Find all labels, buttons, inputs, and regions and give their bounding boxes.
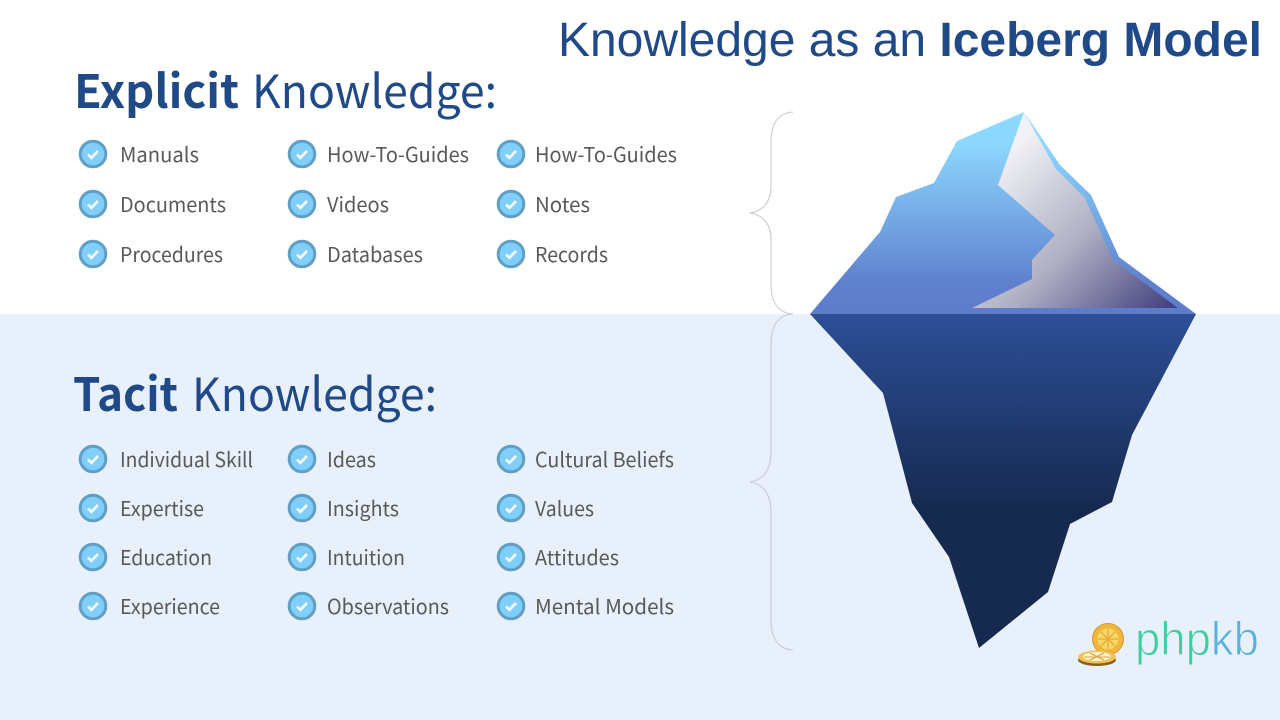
brace: tacit <box>750 314 793 650</box>
iceberg submerged part <box>810 314 1196 648</box>
heading: tacit knowledge: Tacit <box>73 359 178 425</box>
logo wordmark: phpkb <box>1135 612 1259 665</box>
tacit list column 3: Mental Models <box>535 590 674 620</box>
explicit list column 3: Records <box>535 238 608 268</box>
tacit list column 1: Expertise <box>120 492 204 522</box>
logo: phpkb <box>1078 612 1259 666</box>
title: Knowledge as an Iceberg Model <box>558 14 1262 67</box>
tacit list column 2 <box>289 443 449 620</box>
explicit list column 3: How-To-Guides <box>535 138 677 168</box>
iceberg <box>810 112 1196 648</box>
explicit list column 1: Documents <box>120 188 226 218</box>
explicit list column 2: Databases <box>327 238 423 268</box>
tacit list column 1: Individual Skill <box>120 443 253 473</box>
tacit list column 1 <box>80 443 253 620</box>
explicit list column 3 <box>498 138 677 268</box>
tacit list column 3: Values <box>535 492 594 522</box>
tacit list column 2: Ideas <box>327 443 376 473</box>
explicit list column 3: Notes <box>535 188 590 218</box>
explicit list column 2: How-To-Guides <box>327 138 469 168</box>
heading: explicit knowledge: Explicit <box>74 56 239 122</box>
iceberg tip shaded facet <box>972 112 1178 308</box>
tacit list column 1: Experience <box>120 590 220 620</box>
iceberg tip <box>810 112 1196 314</box>
heading: tacit knowledge <box>73 359 437 425</box>
explicit list column 2: Videos <box>327 188 389 218</box>
tacit list column 2: Observations <box>327 590 449 620</box>
explicit list column 1 <box>80 138 226 268</box>
panel: water background <box>0 314 1280 720</box>
brace: explicit <box>750 112 793 314</box>
heading: tacit knowledge: Knowledge: <box>192 359 437 425</box>
heading: explicit knowledge <box>74 56 497 122</box>
tacit list column 3: Attitudes <box>535 541 619 571</box>
explicit list column 1: Procedures <box>120 238 223 268</box>
explicit list column 1: Manuals <box>120 138 199 168</box>
tacit list column 3 <box>498 443 674 620</box>
panel: explicit knowledge <box>74 56 677 268</box>
explicit list column 2 <box>289 138 469 268</box>
tacit list column 1: Education <box>120 541 212 571</box>
panel: tacit knowledge <box>73 359 674 620</box>
logo icon: gold slices <box>1078 624 1124 666</box>
heading: explicit knowledge: Knowledge: <box>252 56 497 122</box>
tacit list column 2: Insights <box>327 492 399 522</box>
tacit list column 3: Cultural Beliefs <box>535 443 674 473</box>
tacit list column 2: Intuition <box>327 541 405 571</box>
